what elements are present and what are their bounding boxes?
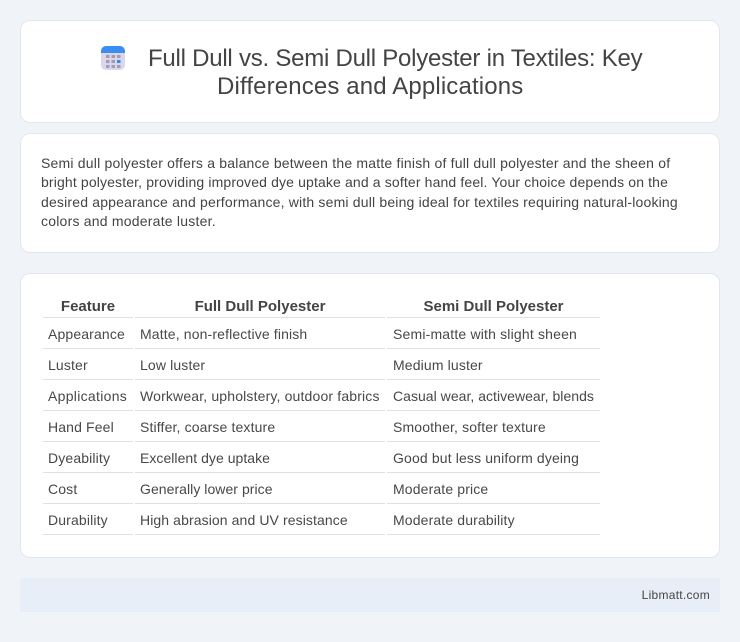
row: Cost: Generally lower price	[140, 481, 273, 497]
table header row: Feature	[61, 298, 115, 315]
row: Luster: Medium luster	[393, 357, 483, 373]
panel: description card	[20, 133, 720, 253]
row: Cost: Moderate price	[393, 481, 488, 497]
icon: calendar grid	[101, 46, 125, 70]
table header row: Semi Dull Polyester	[423, 298, 564, 315]
table header row	[43, 298, 600, 318]
footer bar	[20, 578, 720, 612]
row: Luster: Luster	[48, 357, 88, 373]
row: Durability: Moderate durability	[393, 512, 515, 528]
row: Applications	[43, 388, 600, 411]
row: Dyeability: Good but less uniform dyeing	[393, 450, 579, 466]
row: Cost: Cost	[48, 481, 77, 497]
table header row: Full Dull Polyester	[195, 298, 325, 315]
row: Durability	[43, 512, 600, 535]
panel: header card	[20, 20, 720, 123]
panel: comparison table card	[20, 273, 720, 558]
text block: description: desired appearance and performance, with semi dull being ideal for textiles requiring natural-looking	[41, 194, 678, 210]
row: Applications: Workwear, upholstery, outdoor fabrics	[140, 388, 380, 404]
title: Full Dull vs. Semi Dull Polyester in Textiles: Key	[148, 45, 642, 72]
row: Hand Feel	[43, 419, 600, 442]
row: Appearance	[43, 326, 600, 349]
row: Appearance: Appearance	[48, 326, 125, 342]
title: Differences and Applications	[217, 73, 523, 100]
row: Applications: Casual wear, activewear, blends	[393, 388, 594, 404]
row: Luster: Low luster	[140, 357, 205, 373]
row: Hand Feel: Hand Feel	[48, 419, 114, 435]
row: Hand Feel: Stiffer, coarse texture	[140, 419, 275, 435]
row: Dyeability	[43, 450, 600, 473]
comparison table	[43, 298, 600, 535]
row: Durability: High abrasion and UV resistance	[140, 512, 348, 528]
row: Dyeability: Dyeability	[48, 450, 110, 466]
row: Dyeability: Excellent dye uptake	[140, 450, 270, 466]
text block: description: Semi dull polyester offers a balance between the matte finish of full dull polyester and the sheen of	[41, 155, 670, 171]
text block: description: colors and moderate luster.	[41, 213, 216, 229]
row: Durability: Durability	[48, 512, 108, 528]
row: Hand Feel: Smoother, softer texture	[393, 419, 546, 435]
footer credit: Libmatt.com	[642, 588, 710, 602]
row: Appearance: Matte, non-reflective finish	[140, 326, 307, 342]
text block: description	[41, 155, 678, 229]
row: Appearance: Semi-matte with slight sheen	[393, 326, 577, 342]
row: Cost	[43, 481, 600, 504]
row: Luster	[43, 357, 600, 380]
text block: description: bright polyester, providing improved dye uptake and a softer hand feel. Your choice depends on the	[41, 174, 668, 190]
title	[148, 45, 642, 100]
row: Applications: Applications	[48, 388, 127, 404]
